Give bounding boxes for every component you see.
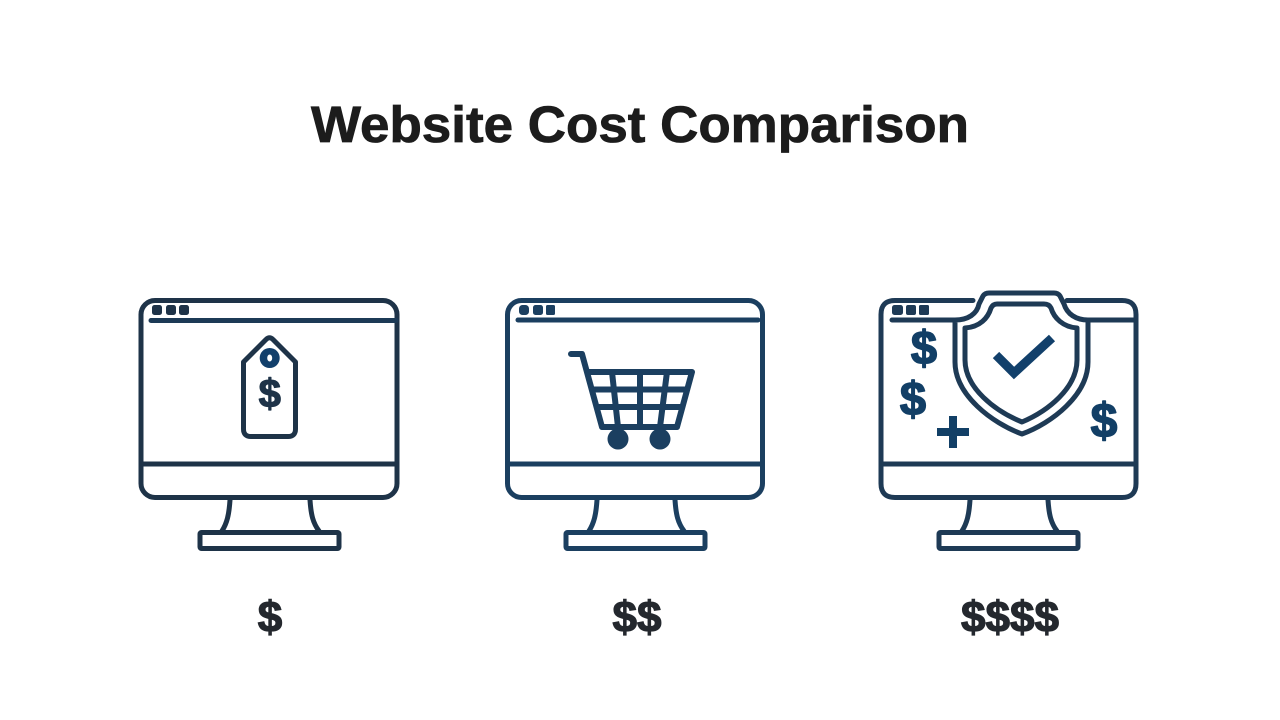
monitor stand: [962, 500, 1057, 531]
browser toolbar line: [518, 318, 758, 322]
monitor frame: [141, 300, 397, 498]
monitor chin line: [142, 462, 396, 466]
panel: high cost monitor with security shield: [881, 293, 1136, 548]
icon: shopping cart: [571, 354, 692, 450]
browser toolbar line: [892, 318, 1134, 322]
cost label: two dollars: $$: [613, 593, 661, 642]
icon: dollar sign left: $: [900, 372, 926, 425]
panel: low cost monitor with price tag: [141, 300, 397, 548]
title: Website Cost Comparison: [311, 96, 969, 153]
monitor frame: [881, 300, 1136, 498]
browser window dots: [519, 305, 555, 315]
icon: dollar sign right: $: [1091, 395, 1118, 448]
icon: price tag: [244, 338, 296, 436]
monitor frame: [508, 300, 762, 498]
monitor base: [200, 532, 339, 548]
icon: plus: [937, 416, 969, 448]
monitor stand: [589, 500, 684, 531]
cost label: four dollars: $$$$: [961, 593, 1059, 642]
monitor base: [939, 532, 1078, 548]
icon: dollar sign top: $: [911, 321, 937, 374]
icon: security shield with check: [955, 293, 1088, 434]
browser window dots: [892, 305, 929, 315]
panel: mid cost monitor with shopping cart: [508, 300, 762, 548]
icon: price tag: $: [259, 372, 281, 416]
monitor chin line: [509, 462, 761, 466]
browser window dots: [152, 305, 189, 315]
monitor base: [566, 532, 705, 548]
cost label: one dollar: $: [258, 593, 282, 642]
browser toolbar line: [151, 318, 396, 323]
monitor chin line: [882, 462, 1135, 466]
monitor stand: [222, 500, 319, 531]
